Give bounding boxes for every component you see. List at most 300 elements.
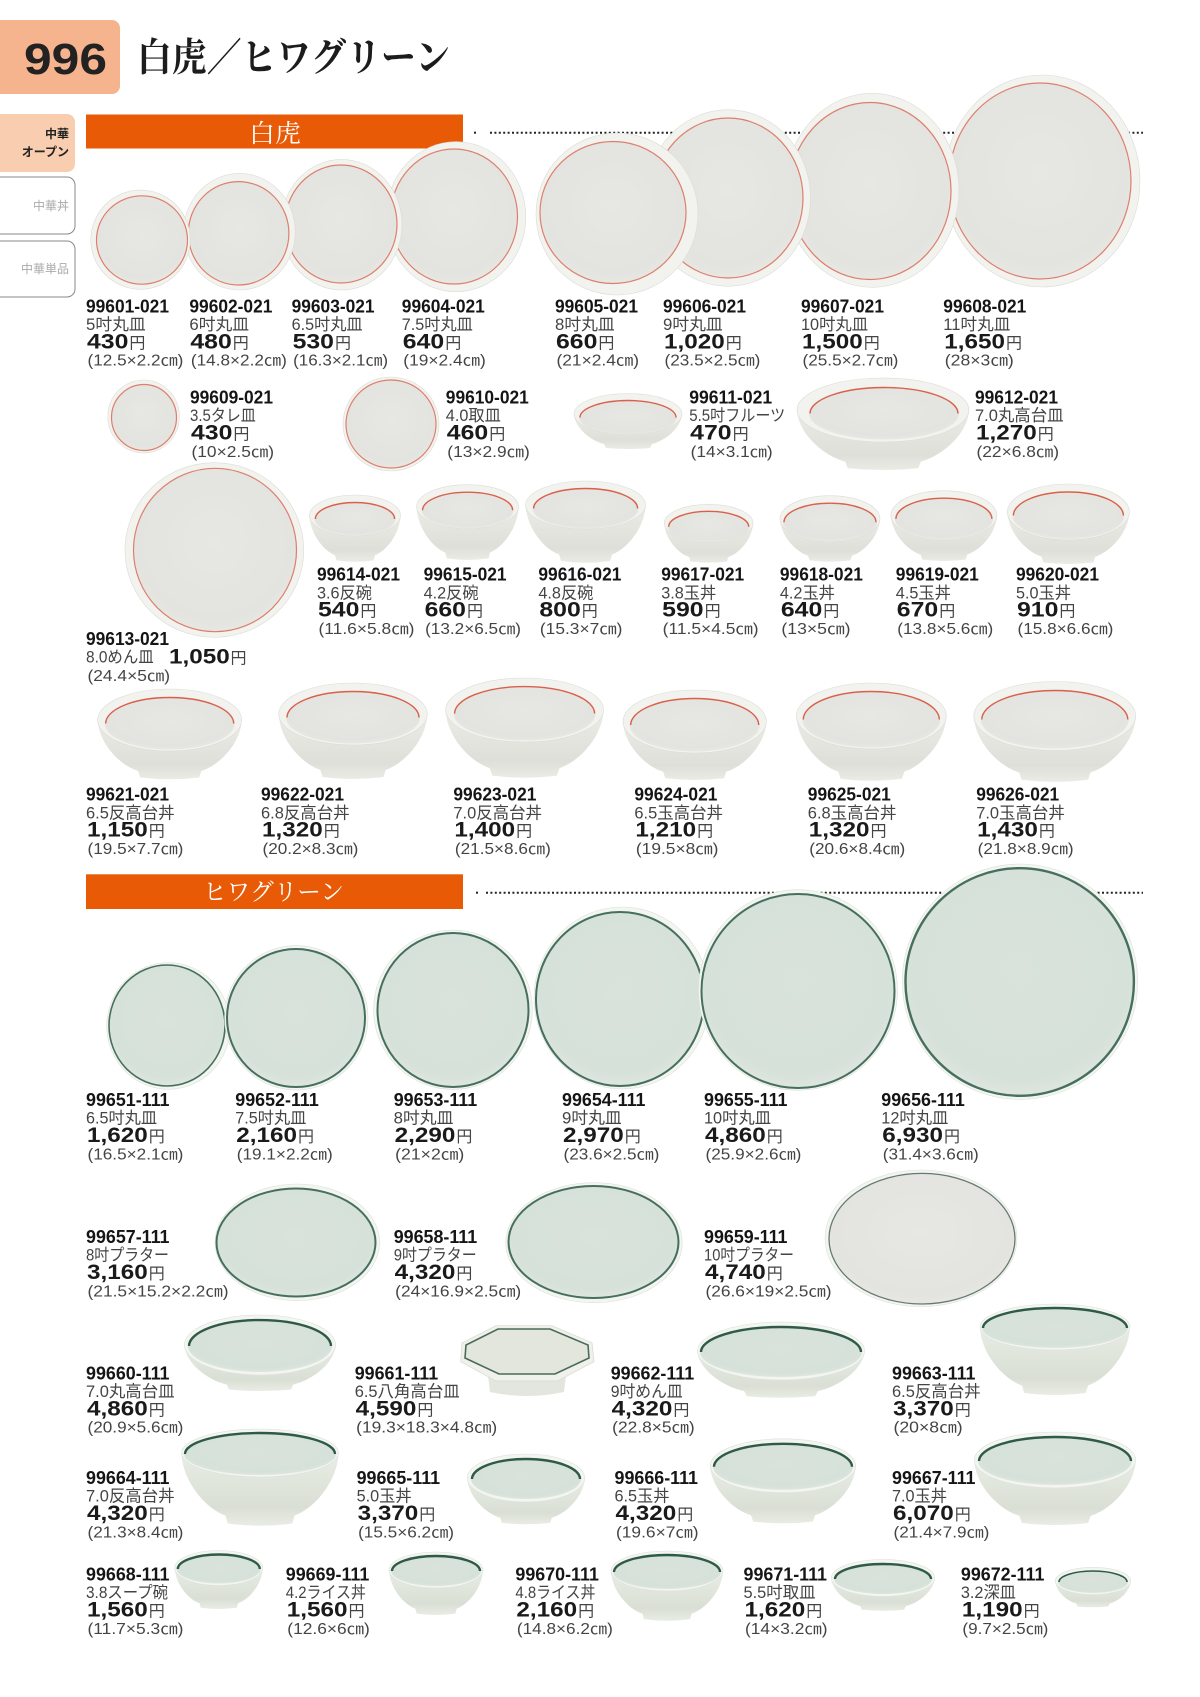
product 99605-021 [536, 133, 698, 370]
product 99615-021: 660 [425, 599, 466, 622]
product 99612-021: 1,270 [976, 422, 1037, 444]
product 99661-111: 4,590 [356, 1397, 416, 1420]
title: 白虎／ヒワグリーン [137, 37, 450, 80]
product 99668-111 [86, 1550, 263, 1638]
product 99651-111 [86, 963, 230, 1163]
product 99669-111: 99669-111 [286, 1564, 369, 1584]
page number tab [0, 20, 120, 94]
product 99608-021: 11吋丸皿 [943, 315, 1010, 334]
product 99670-111: 4.8ライス丼 [515, 1583, 595, 1602]
product 99663-111 [892, 1304, 1130, 1437]
product 99671-111: (14×3.2㎝) [745, 1621, 828, 1638]
product 99660-111 [86, 1315, 336, 1437]
product 99614-021: (11.6×5.8㎝) [318, 621, 414, 638]
product 99671-111: 1,620 [744, 1598, 805, 1622]
product 99665-111: 99665-111 [357, 1467, 440, 1488]
product 99617-021: 3.8玉丼 [661, 583, 716, 602]
product 99659-111: (26.6×19×2.5㎝) [706, 1283, 832, 1300]
product 99610-021: 99610-021 [446, 386, 529, 408]
product 99651-111: (16.5×2.1㎝) [88, 1146, 183, 1163]
product 99662-111 [611, 1322, 865, 1437]
product 99625-021: 6.8玉高台丼 [808, 803, 896, 822]
product 99624-021: 99624-021 [634, 784, 717, 805]
product 99617-021: (11.5×4.5㎝) [663, 621, 759, 638]
product 99601-021: 円 [129, 335, 145, 352]
product 99607-021: 1,500 [802, 330, 863, 353]
product 99608-021: 円 [1006, 335, 1022, 352]
product 99612-021: 7.0丸高台皿 [975, 406, 1064, 425]
product 99652-111: (19.1×2.2㎝) [237, 1146, 333, 1163]
product 99615-021: 円 [467, 604, 483, 621]
product 99659-111: 10吋プラター [704, 1246, 794, 1265]
product 99623-021: (21.5×8.6㎝) [455, 841, 551, 858]
product 99617-021 [661, 504, 759, 638]
product 99603-021: 円 [335, 335, 351, 352]
product 99619-021: 99619-021 [896, 564, 979, 585]
product 99653-111 [374, 930, 532, 1163]
product 99653-111: 99653-111 [394, 1089, 477, 1110]
product 99605-021: 660 [556, 330, 597, 353]
product 99611-021: 470 [690, 422, 732, 444]
product 99625-021: 1,320 [809, 819, 870, 842]
product 99610-021: 円 [489, 426, 505, 444]
product 99607-021 [785, 93, 959, 370]
product 99601-021: 430 [87, 330, 128, 353]
product 99652-111: 2,160 [236, 1124, 297, 1147]
product 99612-021 [797, 378, 1064, 470]
product 99663-111: 99663-111 [892, 1362, 976, 1383]
product 99665-111 [357, 1454, 585, 1541]
product 99662-111: 99662-111 [611, 1362, 694, 1383]
product 99652-111: 99652-111 [235, 1089, 319, 1110]
product 99669-111: 1,560 [287, 1598, 348, 1622]
product 99614-021: 540 [318, 599, 359, 622]
product 99671-111: 5.5吋取皿 [744, 1583, 816, 1602]
product 99651-111: 1,620 [87, 1124, 148, 1147]
product 99655-111: 円 [767, 1129, 783, 1146]
product 99661-111 [355, 1326, 594, 1437]
product 99657-111: 円 [149, 1266, 165, 1283]
product 99653-111: (21×2㎝) [395, 1146, 464, 1163]
product 99653-111: 8吋丸皿 [394, 1109, 453, 1128]
product 99622-021: 99622-021 [261, 784, 344, 805]
product 99669-111: 円 [348, 1604, 365, 1620]
product 99620-021: 5.0玉丼 [1016, 583, 1071, 602]
product 99603-021 [281, 159, 402, 370]
product 99610-021: (13×2.9㎝) [447, 444, 530, 461]
product 99605-021: 8吋丸皿 [555, 315, 615, 334]
product 99610-021: 4.0取皿 [446, 407, 501, 425]
product 99607-021: (25.5×2.7㎝) [802, 353, 898, 370]
product 99662-111: 円 [673, 1402, 689, 1419]
side tab: 中華丼 [0, 177, 75, 234]
product 99670-111 [515, 1551, 723, 1638]
product 99672-111: 円 [1024, 1604, 1040, 1620]
product 99615-021: (13.2×6.5㎝) [425, 621, 521, 638]
product 99603-021: 530 [293, 330, 334, 353]
product 99604-021 [386, 142, 526, 370]
product 99624-021: (19.5×8㎝) [636, 841, 718, 858]
product 99668-111: 1,560 [87, 1598, 148, 1622]
product 99668-111: 3.8スープ碗 [86, 1583, 168, 1602]
product 99663-111: 3,370 [893, 1397, 954, 1420]
product 99652-111: 円 [298, 1129, 314, 1146]
product 99609-021: 99609-021 [190, 386, 273, 408]
product 99615-021: 99615-021 [424, 564, 507, 585]
product 99608-021 [943, 75, 1140, 370]
product 99653-111: 円 [456, 1129, 472, 1146]
product 99667-111: (21.4×7.9㎝) [894, 1524, 989, 1541]
product 99656-111: 12吋丸皿 [881, 1109, 948, 1128]
product 99613-021: 円 [230, 650, 247, 667]
product 99623-021: 円 [516, 824, 532, 841]
product 99618-021: 640 [781, 599, 822, 622]
product 99654-111: 99654-111 [562, 1089, 646, 1110]
product 99602-021: 480 [190, 330, 232, 353]
product 99609-021 [108, 380, 274, 461]
product 99672-111: 99672-111 [961, 1564, 1044, 1584]
product 99602-021 [184, 173, 295, 370]
product 99616-021: 800 [539, 599, 581, 622]
product 99619-021 [891, 491, 997, 638]
product 99613-021: (24.4×5㎝) [88, 668, 170, 685]
product 99654-111: 円 [625, 1129, 641, 1146]
product 99670-111: (14.8×6.2㎝) [517, 1621, 613, 1638]
product 99653-111: 2,290 [395, 1124, 455, 1147]
product 99659-111: 4,740 [705, 1261, 766, 1284]
product 99656-111: 99656-111 [881, 1089, 965, 1110]
side tab: 中華オープン [0, 114, 75, 172]
section heading: ヒワグリーン: ヒワグリーン [203, 880, 344, 906]
product 99661-111: 円 [417, 1402, 433, 1419]
product 99671-111 [744, 1560, 935, 1638]
product 99602-021: (14.8×2.2㎝) [191, 353, 287, 370]
product 99672-111 [961, 1564, 1131, 1638]
product 99603-021: (16.3×2.1㎝) [293, 353, 388, 370]
product 99666-111: 99666-111 [614, 1467, 698, 1488]
product 99623-021 [446, 678, 604, 858]
product 99654-111: (23.6×2.5㎝) [564, 1146, 659, 1163]
product 99671-111: 99671-111 [744, 1564, 827, 1584]
product 99626-021: (21.8×8.9㎝) [978, 841, 1074, 858]
product 99605-021: (21×2.4㎝) [556, 353, 639, 370]
product 99656-111: (31.4×3.6㎝) [883, 1146, 979, 1163]
product 99625-021: 円 [870, 824, 887, 841]
product 99625-021: 99625-021 [808, 784, 891, 805]
product 99661-111: 6.5八角高台皿 [355, 1382, 460, 1401]
product 99656-111: 円 [944, 1129, 960, 1146]
product 99604-021: 円 [445, 335, 461, 352]
product 99665-111: (15.5×6.2㎝) [358, 1524, 454, 1541]
product 99625-021 [796, 683, 946, 858]
product 99619-021: 670 [897, 599, 938, 622]
product 99621-021: 99621-021 [86, 784, 169, 805]
product 99601-021 [86, 190, 190, 370]
side tab: 中華丼: 中華丼 [33, 197, 69, 214]
product 99621-021: 6.5反高台丼 [86, 803, 175, 822]
product 99621-021: (19.5×7.7㎝) [88, 841, 183, 858]
product 99601-021: 99601-021 [86, 295, 169, 316]
product 99665-111: 5.0玉丼 [357, 1487, 412, 1506]
product 99614-021: 99614-021 [317, 564, 400, 585]
product 99657-111: 99657-111 [86, 1226, 170, 1247]
product 99651-111: 99651-111 [86, 1089, 170, 1110]
product 99618-021: 円 [823, 604, 839, 621]
product 99610-021 [343, 377, 530, 471]
product 99614-021: 円 [360, 604, 376, 621]
product 99657-111: 8吋プラター [86, 1246, 169, 1265]
product 99608-021: 99608-021 [943, 295, 1026, 316]
section heading: ヒワグリーン [86, 874, 463, 909]
product 99652-111 [225, 946, 368, 1163]
product 99601-021: (12.5×2.2㎝) [88, 353, 183, 370]
product 99667-111: 7.0玉丼 [892, 1487, 947, 1506]
product 99606-021: (23.5×2.5㎝) [664, 353, 760, 370]
product 99666-111: 円 [677, 1507, 693, 1524]
product 99658-111: 9吋プラター [394, 1246, 477, 1265]
product 99612-021: (22×6.8㎝) [976, 444, 1059, 461]
product 99615-021: 4.2反碗 [424, 583, 479, 602]
product 99654-111: 9吋丸皿 [562, 1109, 622, 1128]
product 99604-021: 7.5吋丸皿 [402, 315, 473, 334]
product 99655-111: (25.9×2.6㎝) [706, 1146, 801, 1163]
product 99658-111: (24×16.9×2.5㎝) [395, 1283, 521, 1300]
product 99668-111: 99668-111 [86, 1564, 170, 1584]
product 99625-021: (20.6×8.4㎝) [809, 841, 905, 858]
product 99658-111: 4,320 [395, 1261, 455, 1284]
product 99616-021: 4.8反碗 [538, 583, 593, 602]
product 99609-021: 430 [191, 422, 232, 444]
product 99620-021: (15.8×6.6㎝) [1018, 621, 1113, 638]
product 99603-021: 6.5吋丸皿 [292, 315, 363, 334]
product 99617-021: 99617-021 [661, 564, 744, 585]
product 99607-021: 円 [864, 335, 880, 352]
product 99664-111 [86, 1429, 338, 1541]
product 99666-111 [614, 1439, 856, 1541]
product 99622-021 [261, 683, 427, 858]
product 99660-111: 4,860 [87, 1397, 148, 1420]
product 99606-021: 9吋丸皿 [663, 315, 723, 334]
product 99623-021: 1,400 [454, 819, 515, 842]
product 99668-111: (11.7×5.3㎝) [88, 1621, 183, 1638]
product 99669-111 [286, 1552, 483, 1638]
product 99667-111: 6,070 [893, 1502, 954, 1525]
product 99621-021 [86, 689, 242, 858]
product 99606-021 [646, 110, 810, 370]
product 99611-021: (14×3.1㎝) [691, 444, 773, 461]
section heading: 白虎: 白虎 [249, 120, 301, 148]
product 99616-021: 99616-021 [538, 564, 621, 585]
product 99608-021: 1,650 [944, 330, 1005, 353]
product 99605-021: 99605-021 [555, 295, 638, 316]
product 99616-021: 円 [582, 604, 598, 621]
product 99604-021: 99604-021 [402, 295, 485, 316]
product 99626-021: 1,430 [977, 819, 1038, 842]
product 99662-111: 9吋めん皿 [611, 1382, 683, 1401]
product 99658-111: 99658-111 [394, 1226, 477, 1247]
product 99616-021 [526, 481, 646, 638]
product 99618-021: 4.2玉丼 [780, 583, 835, 602]
product 99607-021: 99607-021 [801, 295, 884, 316]
product 99615-021 [417, 485, 521, 638]
product 99656-111 [881, 864, 1138, 1163]
section heading: 白虎 [86, 114, 463, 148]
product 99608-021: (28×3㎝) [945, 353, 1014, 370]
product 99664-111: 円 [149, 1507, 165, 1524]
product 99622-021: (20.2×8.3㎝) [262, 841, 358, 858]
product 99619-021: 4.5玉丼 [896, 583, 951, 602]
product 99616-021: (15.3×7㎝) [540, 621, 622, 638]
product 99620-021 [1007, 484, 1129, 638]
product 99670-111: 2,160 [516, 1598, 577, 1622]
product 99660-111: (20.9×5.6㎝) [88, 1420, 183, 1437]
product 99611-021: 円 [733, 426, 749, 444]
product 99624-021: 円 [697, 824, 713, 841]
product 99667-111: 99667-111 [892, 1467, 976, 1488]
product 99605-021: 円 [598, 335, 614, 352]
side tab: 中華単品 [0, 241, 75, 297]
product 99619-021: 円 [939, 604, 955, 621]
product 99602-021: 6吋丸皿 [189, 315, 249, 334]
product 99624-021: 1,210 [635, 819, 696, 842]
product 99613-021: 1,050 [169, 645, 230, 668]
product 99651-111: 6.5吋丸皿 [86, 1109, 157, 1128]
product 99622-021: 6.8反高台丼 [261, 803, 350, 822]
product 99658-111 [394, 1183, 682, 1303]
product 99655-111: 10吋丸皿 [704, 1109, 771, 1128]
product 99664-111: 99664-111 [86, 1467, 170, 1488]
product 99606-021: 円 [726, 335, 742, 352]
product 99610-021: 460 [447, 422, 488, 444]
product 99666-111: (19.6×7㎝) [616, 1524, 698, 1541]
dotted leader [476, 892, 1143, 894]
product 99667-111: 円 [955, 1507, 971, 1524]
product 99612-021: 円 [1038, 426, 1054, 444]
product 99663-111: (20×8㎝) [894, 1420, 963, 1437]
product 99669-111: (12.6×6㎝) [287, 1621, 370, 1638]
product 99663-111: 円 [955, 1402, 971, 1419]
product 99660-111: 99660-111 [86, 1362, 170, 1383]
product 99621-021: 円 [149, 824, 165, 841]
product 99618-021 [780, 496, 880, 638]
product 99606-021: 1,020 [664, 330, 725, 353]
product 99603-021: 99603-021 [292, 295, 375, 316]
product 99626-021: 7.0玉高台丼 [976, 803, 1065, 822]
product 99607-021: 10吋丸皿 [801, 315, 868, 334]
product 99662-111: 4,320 [612, 1397, 672, 1420]
product 99665-111: 円 [419, 1507, 435, 1524]
product 99651-111: 円 [149, 1129, 165, 1146]
product 99666-111: 6.5玉丼 [614, 1487, 670, 1506]
page number tab: 996 [24, 35, 107, 84]
product 99618-021: 99618-021 [780, 564, 863, 585]
product 99672-111: 3.2深皿 [961, 1583, 1016, 1602]
product 99611-021: 99611-021 [689, 386, 772, 408]
product 99624-021 [623, 690, 766, 858]
product 99657-111 [86, 1184, 380, 1301]
product 99622-021: 1,320 [262, 819, 323, 842]
product 99664-111: (21.3×8.4㎝) [88, 1524, 183, 1541]
product 99665-111: 3,370 [358, 1502, 418, 1525]
product 99613-021: 8.0めん皿 [86, 649, 154, 667]
product 99617-021: 円 [705, 604, 721, 621]
product 99617-021: 590 [662, 599, 704, 622]
product 99672-111: 1,190 [962, 1598, 1023, 1622]
product 99609-021: 円 [233, 426, 249, 444]
product 99652-111: 7.5吋丸皿 [235, 1109, 306, 1128]
product 99664-111: 7.0反高台丼 [86, 1487, 175, 1506]
product 99620-021: 99620-021 [1016, 564, 1099, 585]
product 99626-021: 99626-021 [976, 784, 1059, 805]
product 99668-111: 円 [149, 1604, 165, 1620]
dotted leader [474, 132, 1143, 134]
product 99604-021: (19×2.4㎝) [403, 353, 486, 370]
product 99671-111: 円 [806, 1604, 822, 1620]
product 99657-111: (21.5×15.2×2.2㎝) [88, 1283, 228, 1300]
product 99626-021 [974, 682, 1136, 858]
product 99613-021 [86, 463, 304, 685]
product 99602-021: 99602-021 [189, 295, 272, 316]
product 99666-111: 4,320 [616, 1502, 676, 1525]
product 99602-021: 円 [233, 335, 249, 352]
product 99611-021 [574, 386, 785, 461]
product 99620-021: 円 [1059, 604, 1075, 621]
product 99669-111: 4.2ライス丼 [286, 1583, 366, 1602]
product 99614-021 [310, 495, 414, 638]
product 99626-021: 円 [1039, 824, 1055, 841]
product 99609-021: (10×2.5㎝) [192, 444, 274, 461]
product 99655-111: 4,860 [705, 1124, 766, 1147]
product 99620-021: 910 [1017, 599, 1058, 622]
product 99672-111: (9.7×2.5㎝) [962, 1621, 1048, 1638]
product 99661-111: 99661-111 [355, 1362, 438, 1383]
product 99659-111: 99659-111 [704, 1226, 788, 1247]
product 99618-021: (13×5㎝) [781, 621, 850, 638]
product 99612-021: 99612-021 [975, 386, 1058, 408]
product 99656-111: 6,930 [882, 1124, 943, 1147]
product 99623-021: 99623-021 [453, 784, 536, 805]
product 99622-021: 円 [324, 824, 340, 841]
product 99601-021: 5吋丸皿 [86, 315, 146, 334]
side tab: 中華オープン: 中華 [45, 125, 69, 142]
side tab: 中華オープン: オープン [22, 143, 69, 160]
product 99659-111 [704, 1170, 1017, 1307]
product 99667-111 [892, 1432, 1136, 1541]
product 99611-021: 5.5吋フルーツ [689, 406, 785, 425]
product 99663-111: 6.5反高台丼 [892, 1382, 981, 1401]
product 99660-111: 円 [149, 1402, 165, 1419]
product 99655-111: 99655-111 [704, 1089, 788, 1110]
side tab: 中華単品: 中華単品 [21, 260, 69, 277]
product 99670-111: 99670-111 [515, 1564, 599, 1584]
product 99657-111: 3,160 [87, 1261, 148, 1284]
product 99658-111: 円 [456, 1266, 472, 1283]
product 99621-021: 1,150 [87, 819, 148, 842]
product 99664-111: 4,320 [87, 1502, 148, 1525]
product 99670-111: 円 [578, 1604, 594, 1620]
product 99624-021: 6.5玉高台丼 [634, 803, 723, 822]
product 99613-021: 99613-021 [86, 628, 169, 649]
product 99655-111 [698, 890, 898, 1163]
product 99662-111: (22.8×5㎝) [612, 1420, 695, 1437]
product 99660-111: 7.0丸高台皿 [86, 1382, 175, 1401]
product 99659-111: 円 [767, 1266, 783, 1283]
product 99604-021: 640 [403, 330, 444, 353]
product 99654-111 [534, 907, 710, 1163]
product 99661-111: (19.3×18.3×4.8㎝) [356, 1420, 497, 1437]
product 99654-111: 2,970 [563, 1124, 624, 1147]
product 99606-021: 99606-021 [663, 295, 746, 316]
